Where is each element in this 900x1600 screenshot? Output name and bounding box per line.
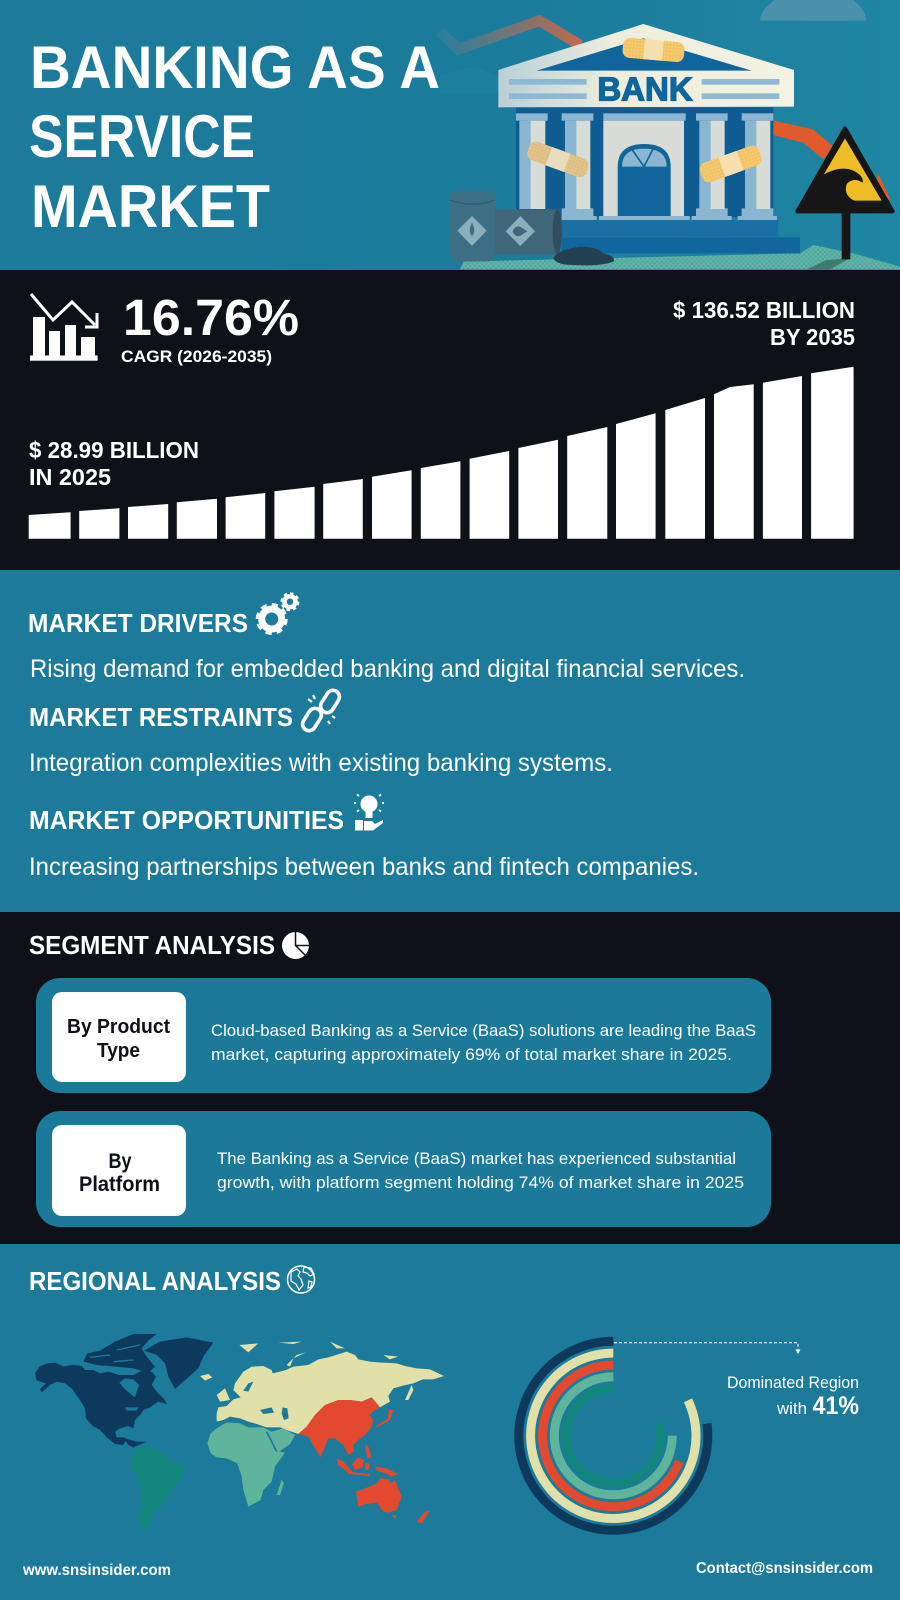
2035 value [673,297,855,350]
heading: market drivers: MARKET DRIVERS [28,608,248,638]
card: by product type: Cloud-based Banking as a Service (BaaS) solutions are leading the BaaS [211,1021,756,1040]
bandage on roof [622,37,685,63]
card: by product type: Type [97,1040,140,1062]
title: BANKING AS A [30,34,440,101]
region: North America [35,1334,213,1447]
card: by product type [36,978,771,1093]
footer: website: www.snsinsider.com [22,1562,171,1579]
CAGR label: CAGR (2026-2035) [121,347,272,366]
icon: pie chart [282,932,309,959]
world map [35,1334,444,1531]
heading: regional analysis: REGIONAL ANALYSIS [29,1266,281,1296]
BANK lettering: BANK [597,72,693,109]
heading: segment analysis: SEGMENT ANALYSIS [29,930,275,960]
region: Europe and North Asia [200,1342,444,1434]
text: drivers: Rising demand for embedded banking and digital financial services. [30,655,745,683]
panel: market dynamics [0,570,900,912]
2025 value: $ 28.99 BILLION [29,437,199,463]
orange falling arrow [768,119,833,159]
CAGR value: 16.76% [123,289,299,346]
2025 value [29,437,199,490]
callout: dominated region [727,1374,859,1420]
panel: segment analysis [0,912,900,1244]
title [29,34,440,240]
card: by platform: growth, with platform segment holding 74% of market share in 2025 [217,1173,744,1192]
card: by platform: By [108,1150,132,1173]
header banner [0,0,900,270]
2035 value: BY 2035 [770,324,855,350]
icon: globe [288,1266,314,1293]
oil barrels [450,191,614,265]
2035 value: $ 136.52 BILLION [673,297,855,323]
card: by platform [36,1111,771,1227]
bank pediment [498,24,794,107]
region: Asia Pacific [298,1397,430,1523]
dashed callout arrow [614,1343,800,1354]
title: MARKET [31,173,270,240]
card: by product type: By Product [67,1016,170,1038]
bandage on left column [525,140,591,179]
heading: market opportunities: MARKET OPPORTUNITIES [29,805,344,835]
card: by platform: Platform [79,1173,160,1196]
region: South America [132,1446,185,1531]
card: by product type: market, capturing approximately 69% of total market share in 2025. [211,1045,732,1064]
icon: gears [258,594,298,633]
callout: dominated region: Dominated Region [727,1374,859,1392]
region: Africa and Middle East [207,1422,295,1507]
text: opportunities: Increasing partnerships between banks and fintech companies. [29,853,699,881]
bar chart: market growth [29,367,854,539]
panel: regional analysis [0,1244,900,1600]
footer: contact: Contact@snsinsider.com [696,1560,873,1577]
panel: market size [0,270,900,570]
title: SERVICE [29,103,255,170]
2025 value: IN 2025 [29,464,111,490]
icon: declining chart [30,294,98,361]
callout: dominated region: 41% [812,1392,859,1420]
card: by platform: The Banking as a Service (BaaS) market has experienced substantial [217,1149,736,1168]
bandage on right column [698,144,764,184]
warning sign [797,128,893,259]
icon: idea in hand [354,794,384,830]
text: restraints: Integration complexities with existing banking systems. [29,749,613,777]
icon: broken chain [300,688,342,733]
heading: market restraints: MARKET RESTRAINTS [29,702,293,732]
illustration: bank under repair [440,0,900,269]
callout: dominated region: with [776,1400,807,1418]
radial bar chart [519,1341,708,1530]
